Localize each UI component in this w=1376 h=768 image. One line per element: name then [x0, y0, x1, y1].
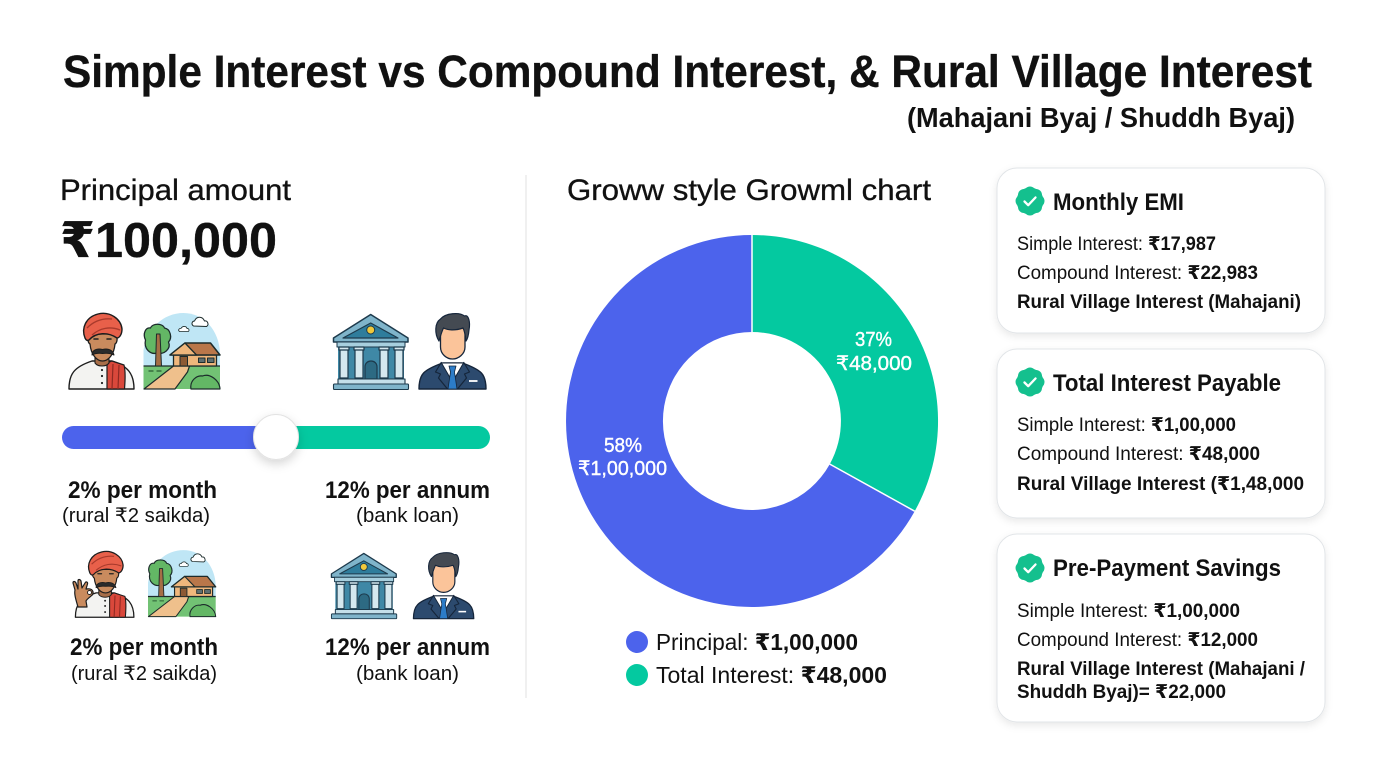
title: Simple Interest vs Compound Interest, & Rural Village Interest — [63, 46, 1312, 97]
principal value: ₹100,000 — [60, 214, 277, 268]
panel: pre-payment savings — [997, 534, 1325, 722]
card heading: Pre-Payment Savings — [1053, 555, 1281, 582]
legend: Total Interest: ₹48,000 — [656, 662, 887, 688]
panel: principal and rates — [60, 174, 490, 685]
card values: Compound Interest: ₹22,983 — [1017, 263, 1258, 284]
icon: village house — [144, 313, 220, 389]
rural rate, row 2: 2% per month — [70, 634, 218, 661]
legend — [626, 629, 887, 688]
card heading: Monthly EMI — [1053, 189, 1184, 216]
icon: farmer with hand gesture — [73, 551, 134, 617]
card values: Simple Interest: ₹17,987 — [1017, 234, 1216, 255]
card values: Compound Interest: ₹12,000 — [1017, 630, 1258, 651]
legend: Principal: ₹1,00,000 — [656, 629, 858, 655]
interest share label: 37% — [855, 329, 892, 351]
card values: Simple Interest: ₹1,00,000 — [1017, 601, 1240, 622]
icon: village house, row 2 — [148, 550, 216, 617]
card values: Rural Village Interest (₹1,48,000 — [1017, 474, 1304, 495]
rural rate, row 2 — [70, 634, 218, 685]
icon: banker, row 2 — [413, 553, 474, 619]
bank rate, row 1 — [325, 477, 490, 527]
slider — [62, 414, 490, 460]
donut chart — [566, 235, 938, 607]
card values: Rural Village Interest (Mahajani) — [1017, 292, 1301, 313]
icon: check badge — [1013, 184, 1047, 218]
card values — [1017, 234, 1301, 313]
panel: growth chart — [566, 174, 938, 688]
rural rate, row 2: (rural ₹2 saikda) — [71, 663, 217, 685]
card values: Simple Interest: ₹1,00,000 — [1017, 415, 1236, 436]
card values — [1017, 601, 1306, 703]
rural rate, row 1 — [62, 477, 217, 527]
card values: Rural Village Interest (Mahajani / — [1017, 659, 1306, 680]
card heading: Total Interest Payable — [1053, 370, 1281, 397]
chart heading: Groww style Growml chart — [567, 174, 932, 207]
rural rate, row 1: (rural ₹2 saikda) — [62, 505, 210, 527]
card values: Shuddh Byaj)= ₹22,000 — [1017, 682, 1226, 703]
subtitle: (Mahajani Byaj / Shuddh Byaj) — [907, 102, 1295, 133]
icon: check badge — [1013, 551, 1047, 585]
icon: farmer — [69, 313, 134, 389]
interest share label — [836, 329, 912, 375]
panel: total interest payable — [997, 349, 1325, 518]
principal share label: ₹1,00,000 — [578, 458, 667, 480]
icon: bank, row 2 — [331, 553, 397, 619]
bank rate, row 1: (bank loan) — [356, 505, 459, 527]
bank rate, row 2: (bank loan) — [356, 663, 459, 685]
bank rate, row 1: 12% per annum — [325, 477, 490, 504]
interest share label: ₹48,000 — [836, 353, 912, 375]
rural rate, row 1: 2% per month — [68, 477, 217, 504]
principal share label — [578, 435, 667, 480]
icon: check badge — [1013, 365, 1047, 399]
bank rate, row 2 — [325, 634, 490, 685]
panel: monthly EMI — [997, 168, 1325, 333]
bank rate, row 2: 12% per annum — [325, 634, 490, 661]
principal share label: 58% — [604, 435, 642, 457]
principal label: Principal amount — [60, 174, 292, 207]
card values — [1017, 415, 1304, 495]
icon: bank — [334, 314, 408, 390]
icon: banker — [419, 314, 486, 389]
card values: Compound Interest: ₹48,000 — [1017, 444, 1260, 465]
